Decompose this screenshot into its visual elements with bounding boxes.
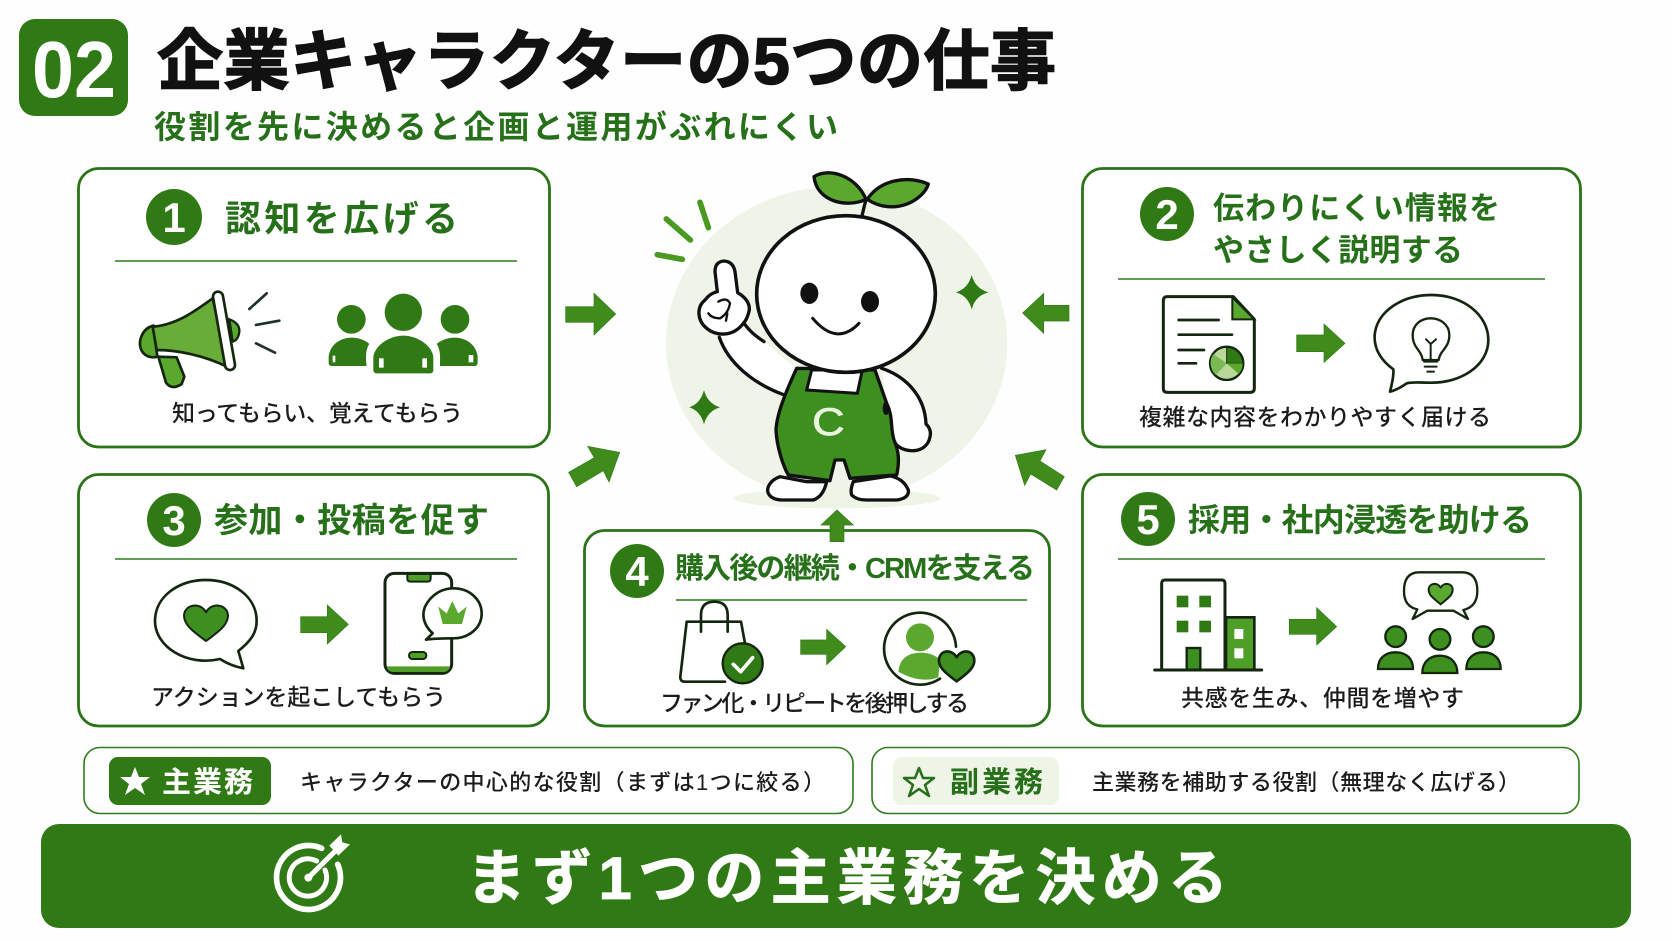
icon: idea speech bubble bbox=[1375, 295, 1488, 392]
main role badge bbox=[109, 757, 271, 805]
sparkle right bbox=[956, 275, 988, 309]
ground shadow bbox=[733, 488, 940, 508]
sub role description: 主業務を補助する役割（無理なく広げる） bbox=[1092, 770, 1520, 795]
subtitle: 役割を先に決めると企画と運用がぶれにくい bbox=[154, 109, 838, 145]
caption 1: 知ってもらい、覚えてもらう bbox=[172, 400, 463, 426]
number 3: 3 bbox=[162, 497, 186, 544]
title: 企業キャラクターの5つの仕事 bbox=[157, 24, 1056, 98]
hand detail bbox=[708, 300, 730, 321]
number 3 bbox=[147, 493, 201, 547]
icon: heart speech bubble bbox=[155, 580, 257, 668]
arrow: card 4 to mascot bbox=[821, 510, 853, 542]
left foot bbox=[768, 477, 827, 500]
icon: megaphone bbox=[140, 293, 279, 387]
heading 4: 購入後の継続・CRMを支える bbox=[675, 552, 1035, 585]
mouth bbox=[813, 318, 859, 334]
arrow: company to team bbox=[1289, 608, 1337, 645]
icon: fan with heart bbox=[884, 613, 974, 685]
number 5 bbox=[1121, 492, 1175, 546]
head bbox=[757, 216, 935, 372]
heading 2: 伝わりにくい情報を bbox=[1213, 191, 1500, 226]
panel 1: awareness bbox=[78, 168, 550, 447]
sparkle left bbox=[689, 390, 720, 424]
icon: target bbox=[277, 834, 350, 909]
legend: sub role bbox=[872, 748, 1579, 814]
heading 2: やさしく説明する bbox=[1213, 233, 1463, 268]
sub role badge: 副業務 bbox=[950, 766, 1043, 799]
arrow: card 3 to mascot bbox=[569, 446, 620, 487]
overalls bbox=[776, 368, 898, 481]
leaf stem bbox=[862, 197, 867, 217]
heading 5: 採用・社内浸透を助ける bbox=[1188, 502, 1532, 538]
emphasis rays bbox=[657, 202, 708, 259]
number 4 bbox=[610, 544, 664, 598]
sub role badge bbox=[893, 757, 1059, 805]
section number badge: 02 bbox=[32, 25, 116, 114]
right arm outline bbox=[882, 368, 930, 451]
pointing hand bbox=[699, 261, 749, 334]
number 2 bbox=[1140, 187, 1194, 241]
heading 2 bbox=[1213, 191, 1500, 268]
call-to-action banner bbox=[41, 824, 1631, 928]
left leaf bbox=[814, 173, 866, 203]
arrow: reaction to post bbox=[301, 605, 348, 644]
arm outline bbox=[719, 323, 783, 394]
panel 5: recruiting bbox=[1082, 474, 1580, 726]
icon: document with chart bbox=[1163, 297, 1254, 392]
icon: office building bbox=[1155, 580, 1262, 670]
main role description: キャラクターの中心的な役割（まずは1つに絞る） bbox=[300, 770, 825, 795]
legend: main role bbox=[84, 748, 853, 814]
arrow: card 1 to mascot bbox=[566, 293, 616, 335]
mascot with backdrop bbox=[657, 173, 1007, 508]
icon: shopping bag with check bbox=[680, 602, 763, 683]
number 4: 4 bbox=[625, 548, 649, 595]
main role badge: 主業務 bbox=[162, 766, 253, 799]
caption 4: ファン化・リピートを後押しする bbox=[660, 690, 969, 716]
number 2: 2 bbox=[1155, 191, 1179, 238]
eyes bbox=[800, 283, 879, 312]
right leaf bbox=[867, 180, 928, 207]
number 1 bbox=[146, 189, 202, 245]
right foot bbox=[851, 476, 908, 500]
armpit shade bbox=[883, 402, 889, 415]
overalls bib bbox=[807, 370, 862, 393]
heading 1: 認知を広げる bbox=[225, 198, 458, 239]
heading 3: 参加・投稿を促す bbox=[214, 502, 489, 540]
arrow: card 2 to mascot bbox=[1023, 293, 1069, 333]
number 5: 5 bbox=[1136, 496, 1160, 543]
overalls letter C: C bbox=[812, 400, 845, 444]
arrow: card 5 to mascot bbox=[1015, 450, 1064, 490]
arrow: purchase to fan bbox=[801, 629, 846, 665]
right arm fill bbox=[882, 368, 930, 451]
caption 5: 共感を生み、仲間を増やす bbox=[1181, 685, 1464, 711]
caption 3: アクションを起こしてもらう bbox=[151, 684, 446, 710]
icon: team with heart bubble bbox=[1378, 572, 1501, 673]
panel 4: CRM bbox=[584, 530, 1050, 726]
icon: phone with crown bubble bbox=[385, 573, 482, 673]
panel 2: explain bbox=[1082, 168, 1580, 447]
banner text: まず1つの主業務を決める bbox=[466, 845, 1228, 912]
backdrop circle bbox=[666, 187, 1007, 500]
panel 3: participation bbox=[78, 474, 548, 726]
number 1: 1 bbox=[162, 194, 186, 241]
raised arm bbox=[719, 323, 798, 394]
icon: audience bbox=[329, 294, 478, 373]
caption 2: 複雑な内容をわかりやすく届ける bbox=[1139, 404, 1491, 430]
arrow: document to idea bbox=[1297, 324, 1345, 362]
